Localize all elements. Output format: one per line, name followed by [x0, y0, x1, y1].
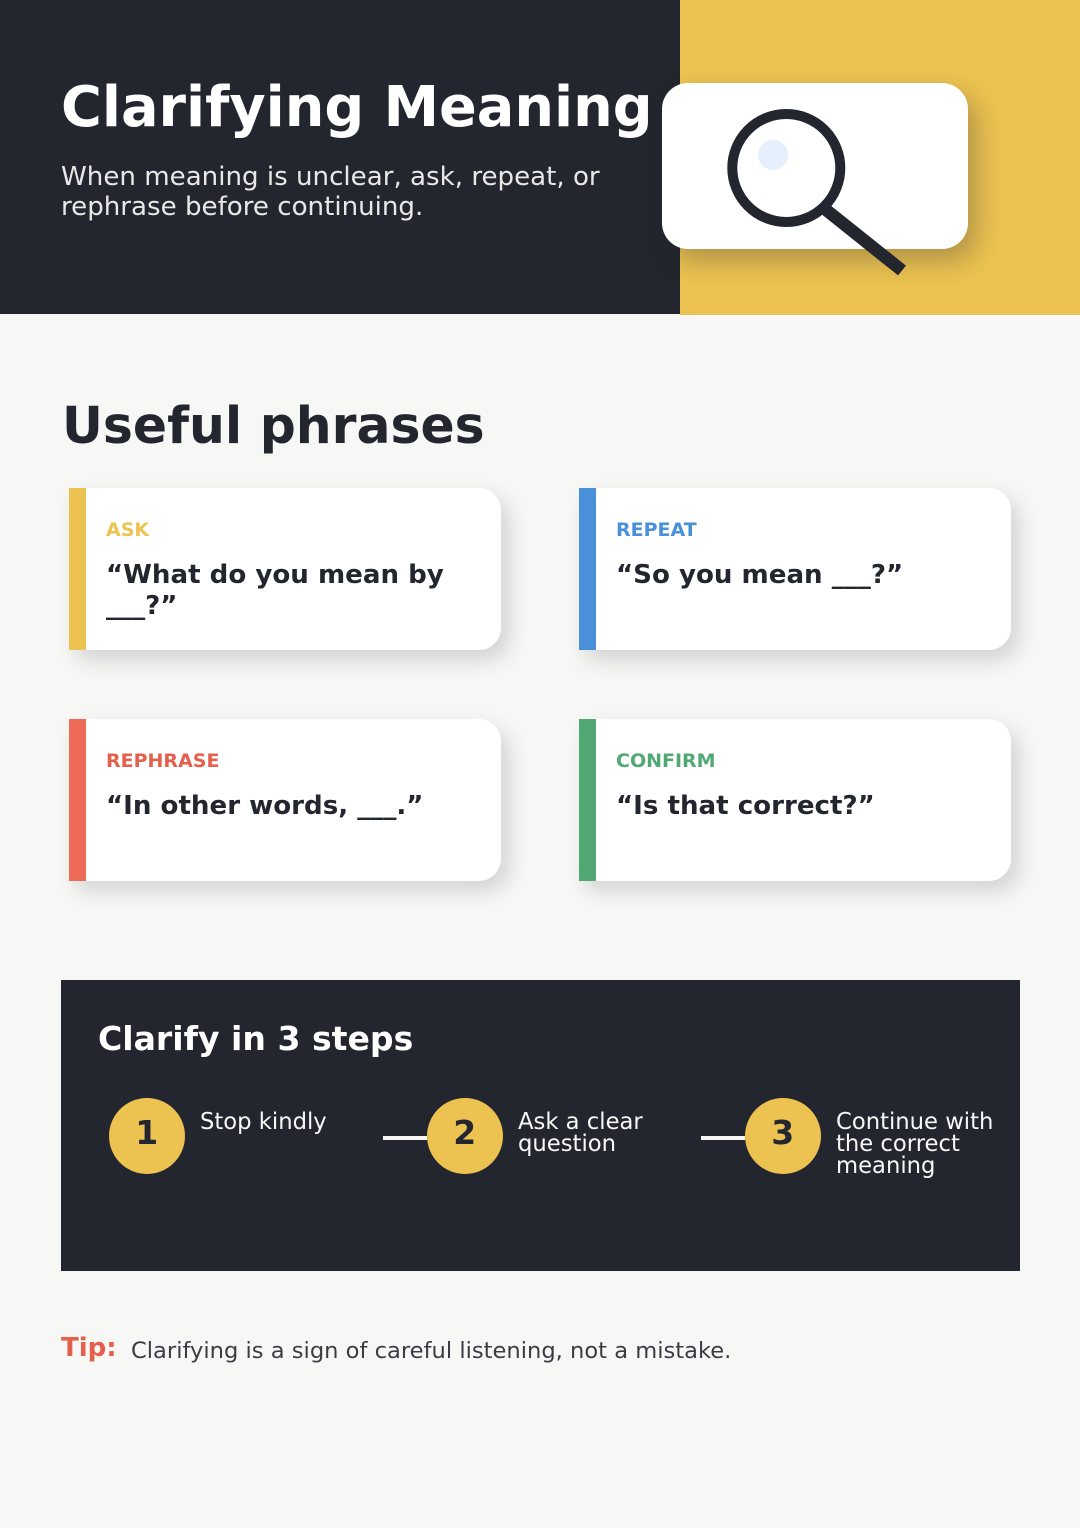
- step 1 number: 1: [135, 1113, 158, 1152]
- step 3 number: 3: [771, 1113, 794, 1152]
- step 2 text: question: [518, 1131, 616, 1157]
- phrase: ask: “What do you mean by: [106, 560, 444, 590]
- step 2 number: 2: [453, 1113, 476, 1152]
- step 1 number: [109, 1098, 185, 1174]
- step 2 number: [427, 1098, 503, 1174]
- subtitle: When meaning is unclear, ask, repeat, or: [61, 162, 600, 192]
- subtitle: rephrase before continuing.: [61, 192, 423, 222]
- accent bar: ask: [69, 488, 86, 650]
- accent bar: repeat: [579, 488, 596, 650]
- connector 1: [383, 1136, 427, 1140]
- step 3 text: meaning: [836, 1153, 935, 1179]
- card: repeat: [579, 488, 1011, 650]
- step 2 text: [518, 1109, 643, 1157]
- step 2: [427, 1098, 643, 1174]
- label: ask: ASK: [106, 519, 149, 541]
- card: rephrase: [69, 719, 501, 881]
- steps panel: [61, 980, 1020, 1271]
- step 3: [745, 1098, 993, 1179]
- step 1 text: Stop kindly: [200, 1109, 327, 1135]
- connector 2: [701, 1136, 745, 1140]
- card: confirm: [579, 719, 1011, 881]
- title: Clarifying Meaning: [61, 75, 653, 140]
- section heading: Useful phrases: [62, 396, 485, 455]
- card: ask: [69, 488, 501, 650]
- step 1: [109, 1098, 327, 1174]
- step 3 text: [836, 1109, 993, 1179]
- phrase: confirm: “Is that correct?”: [616, 791, 875, 821]
- step 2 text: Ask a clear: [518, 1109, 643, 1135]
- tip text: Clarifying is a sign of careful listening, not a mistake.: [131, 1338, 731, 1364]
- step 3 number: [745, 1098, 821, 1174]
- label: confirm: CONFIRM: [616, 750, 716, 772]
- step 3 text: the correct: [836, 1131, 960, 1157]
- phrase: ask: ___?”: [106, 591, 177, 621]
- white icon card: [662, 83, 968, 249]
- phrase: rephrase: “In other words, ___.”: [106, 791, 423, 821]
- tip label: Tip:: [61, 1333, 117, 1363]
- label: rephrase: REPHRASE: [106, 750, 219, 772]
- icon: magnifying glass: [727, 109, 906, 276]
- accent bar: confirm: [579, 719, 596, 881]
- label: repeat: REPEAT: [616, 519, 697, 541]
- yellow header panel: [680, 0, 1080, 314]
- tip: [61, 1333, 731, 1364]
- accent bar: rephrase: [69, 719, 86, 881]
- header band: [0, 0, 1080, 314]
- steps heading: Clarify in 3 steps: [98, 1019, 413, 1058]
- phrase: repeat: “So you mean ___?”: [616, 560, 903, 590]
- subtitle: [61, 162, 600, 222]
- step 3 text: Continue with: [836, 1109, 993, 1135]
- phrase: ask: [106, 560, 444, 621]
